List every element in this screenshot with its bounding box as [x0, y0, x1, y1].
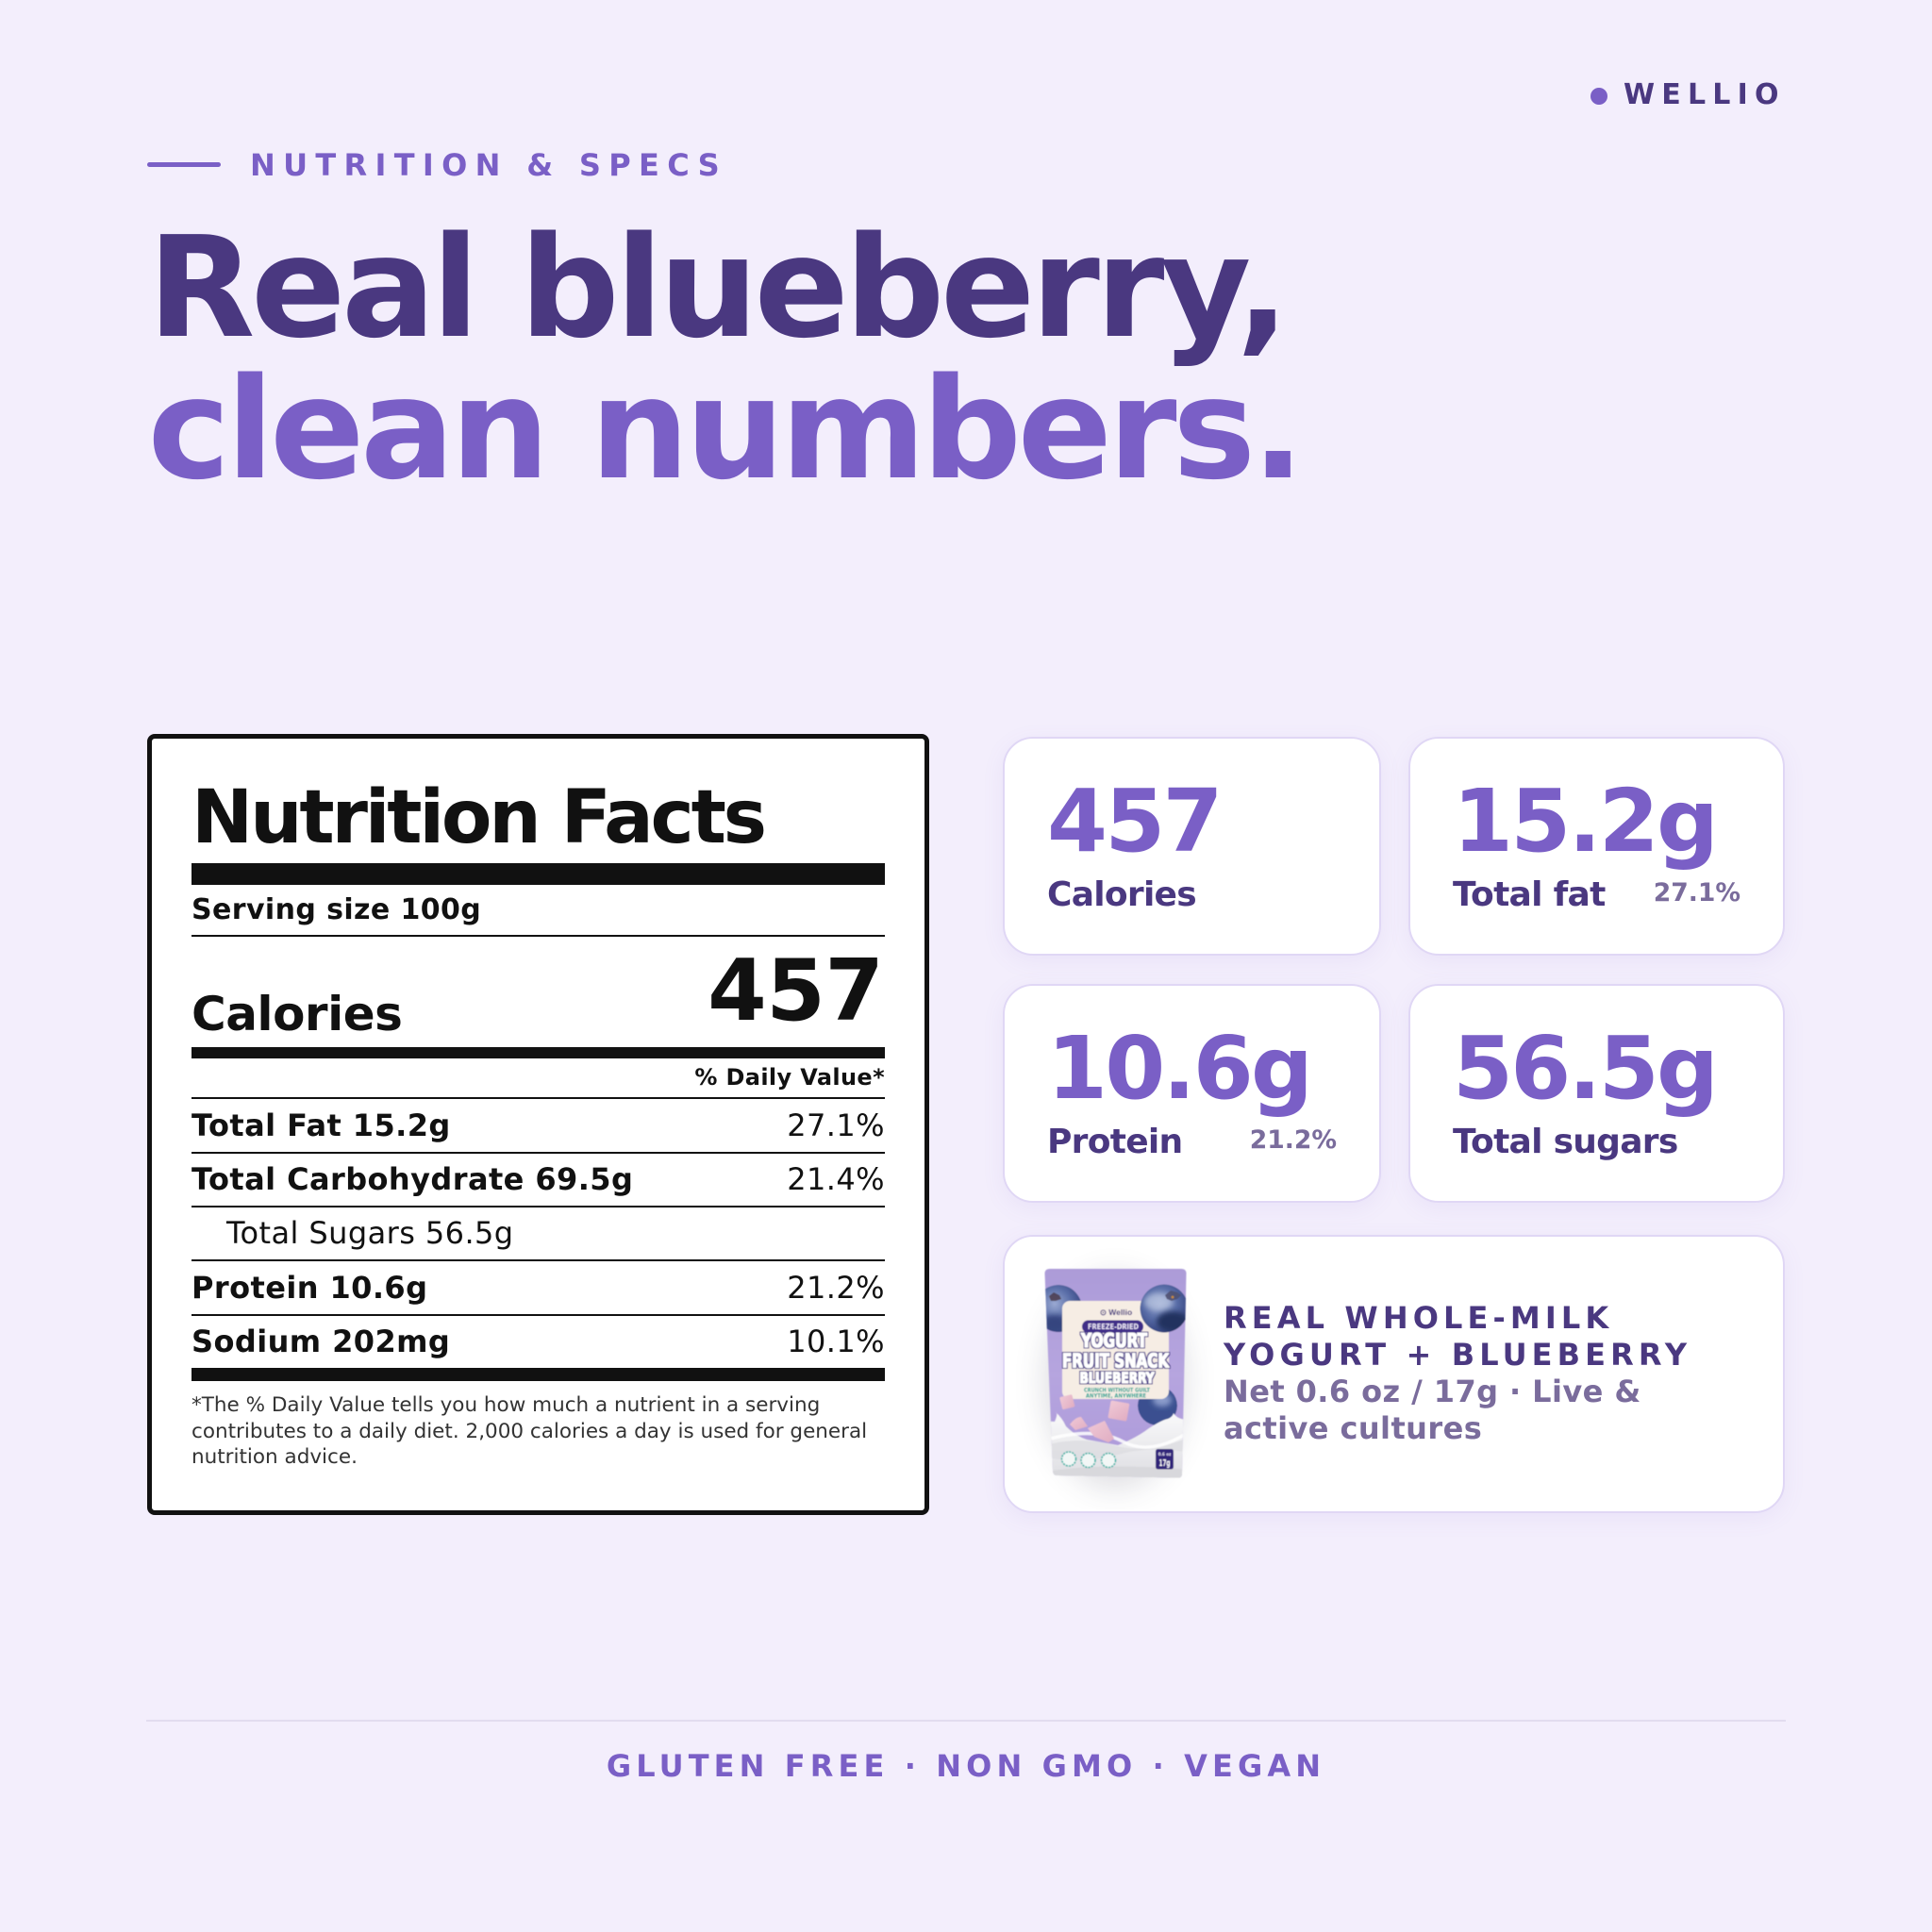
row: protein: Protein 10.6g	[192, 1270, 427, 1306]
product details: active cultures	[1224, 1410, 1482, 1446]
rule	[192, 1314, 885, 1316]
rule	[192, 935, 885, 937]
product name	[1223, 1300, 1691, 1373]
bottom blueberry	[1138, 1386, 1177, 1425]
heavy rule	[192, 1368, 885, 1381]
pouch certification badges	[1062, 1452, 1115, 1468]
heavy rule	[192, 863, 885, 885]
pouch tagline	[1084, 1387, 1151, 1400]
stat card: total sugars	[1408, 984, 1785, 1203]
stat card: calories: 457	[1047, 771, 1221, 872]
stat card: total fat: Total fat	[1453, 875, 1606, 913]
row: total sugars: Total Sugars 56.5g	[226, 1215, 514, 1251]
pouch logo: ⊙ Wellio	[1100, 1307, 1132, 1317]
row: protein	[192, 1270, 885, 1306]
footer claims: GLUTEN FREE · NON GMO · VEGAN	[607, 1748, 1325, 1784]
row: total fat: 27.1%	[787, 1108, 885, 1143]
eyebrow text: NUTRITION & SPECS	[250, 147, 727, 183]
footer rule	[146, 1720, 1786, 1722]
footnote: *The % Daily Value tells you how much a nutrient in a serving contributes to a daily diet. 2,000 calories a day is used for general nutrition advice.	[192, 1393, 867, 1469]
stat card: total fat: 27.1%	[1654, 878, 1740, 908]
product name: YOGURT + BLUEBERRY	[1224, 1337, 1691, 1373]
freeze-dried pill	[1082, 1321, 1143, 1333]
nutrition heading: Nutrition Facts	[192, 775, 764, 860]
calories label: Calories	[192, 987, 402, 1041]
brand name: WELLIO	[1624, 78, 1786, 111]
stat card: protein: Protein	[1047, 1123, 1182, 1160]
row: sodium	[192, 1324, 885, 1359]
stat card: total fat: 15.2g	[1453, 771, 1716, 872]
pouch tagline: ANYTIME, ANYWHERE	[1086, 1392, 1146, 1400]
icon: product pouch	[1036, 1268, 1194, 1496]
row: total fat: Total Fat 15.2g	[192, 1108, 451, 1143]
brand: Wellio	[1591, 78, 1786, 111]
row: total carbohydrate	[192, 1161, 885, 1197]
title	[147, 207, 1301, 510]
row: total fat	[192, 1108, 885, 1143]
brand dot	[1591, 88, 1607, 105]
pouch product name: FRUIT SNACK	[1062, 1349, 1170, 1372]
product details	[1224, 1374, 1641, 1446]
row: total carbohydrate: 21.4%	[787, 1161, 885, 1197]
icon: product pouch: 0.6 oz	[1158, 1452, 1172, 1457]
pouch product name	[1062, 1329, 1170, 1387]
daily value header: % Daily Value*	[694, 1064, 885, 1091]
stat card: total fat	[1408, 737, 1785, 956]
stat card: total sugars: 56.5g	[1453, 1018, 1716, 1119]
stat card: protein: 21.2%	[1250, 1125, 1337, 1155]
rule	[192, 1206, 885, 1208]
pouch product name: BLUEBERRY	[1079, 1369, 1155, 1387]
row: sodium: 10.1%	[787, 1324, 885, 1359]
title: Real blueberry,	[147, 207, 1285, 369]
left blueberry	[1045, 1285, 1081, 1332]
stat card: protein: 10.6g	[1047, 1018, 1310, 1119]
right blueberry	[1140, 1285, 1189, 1332]
title: clean numbers.	[147, 348, 1301, 510]
panel: nutrition facts label	[147, 734, 929, 1515]
pouch weight badge	[1156, 1449, 1174, 1470]
icon: product pouch: 17g	[1158, 1458, 1170, 1469]
rule	[192, 1152, 885, 1154]
row: protein: 21.2%	[787, 1270, 885, 1306]
milk splash	[1050, 1413, 1184, 1472]
eyebrow	[147, 147, 727, 183]
stat card: calories	[1003, 737, 1381, 956]
stat card: protein	[1003, 984, 1381, 1203]
stat card: calories: Calories	[1047, 875, 1196, 913]
medium rule	[192, 1047, 885, 1058]
pouch product name: YOGURT	[1080, 1329, 1147, 1352]
eyebrow line	[147, 162, 221, 167]
row: sodium: Sodium 202mg	[192, 1324, 450, 1359]
rule	[192, 1259, 885, 1261]
row: total carbohydrate: Total Carbohydrate 69.5g	[192, 1161, 633, 1197]
rule	[192, 1097, 885, 1099]
serving size: Serving size 100g	[192, 893, 481, 926]
product details: Net 0.6 oz / 17g · Live &	[1224, 1374, 1641, 1409]
stat card: total sugars: Total sugars	[1453, 1123, 1678, 1160]
calories value: 457	[708, 941, 883, 1041]
icon: product pouch: FREEZE-DRIED	[1088, 1323, 1139, 1331]
product name: REAL WHOLE-MILK	[1224, 1300, 1613, 1336]
freeze-dried cubes	[1059, 1394, 1129, 1442]
panel: product card	[1003, 1235, 1785, 1513]
pouch tagline: CRUNCH WITHOUT GUILT	[1084, 1387, 1151, 1394]
